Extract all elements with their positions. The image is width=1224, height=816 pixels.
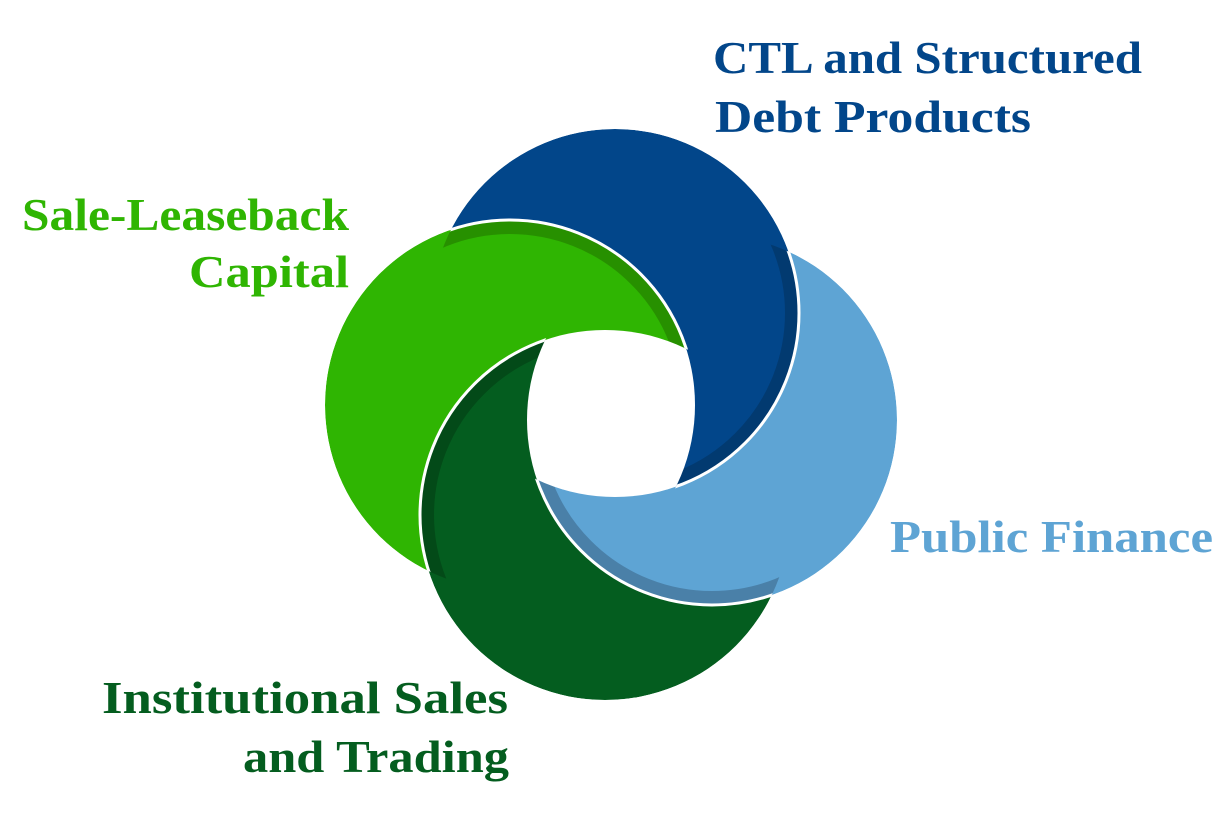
label: CTL and Structured Debt Products: Debt Products <box>715 91 1031 142</box>
label: Institutional Sales and Trading <box>102 672 509 782</box>
petal: Sale-Leaseback Capital (light green) <box>325 220 695 590</box>
petal: Public Finance (light blue) <box>527 235 897 605</box>
label: Institutional Sales and Trading: Institutional Sales <box>102 672 508 723</box>
label: Sale-Leaseback Capital: Capital <box>189 246 349 297</box>
label: Sale-Leaseback Capital <box>22 189 349 297</box>
label: Institutional Sales and Trading: and Trading <box>243 731 509 782</box>
label: CTL and Structured Debt Products: CTL and Structured <box>713 32 1142 83</box>
label: Public Finance: Public Finance <box>890 511 1213 562</box>
swirl diagram <box>325 129 897 700</box>
petal: CTL and Structured Debt Products (blue) <box>431 129 799 497</box>
label: CTL and Structured Debt Products <box>713 32 1142 142</box>
white edge lines <box>418 218 800 606</box>
petal: Institutional Sales and Trading (dark green) <box>420 330 790 700</box>
label: Sale-Leaseback Capital: Sale-Leaseback <box>22 189 349 240</box>
